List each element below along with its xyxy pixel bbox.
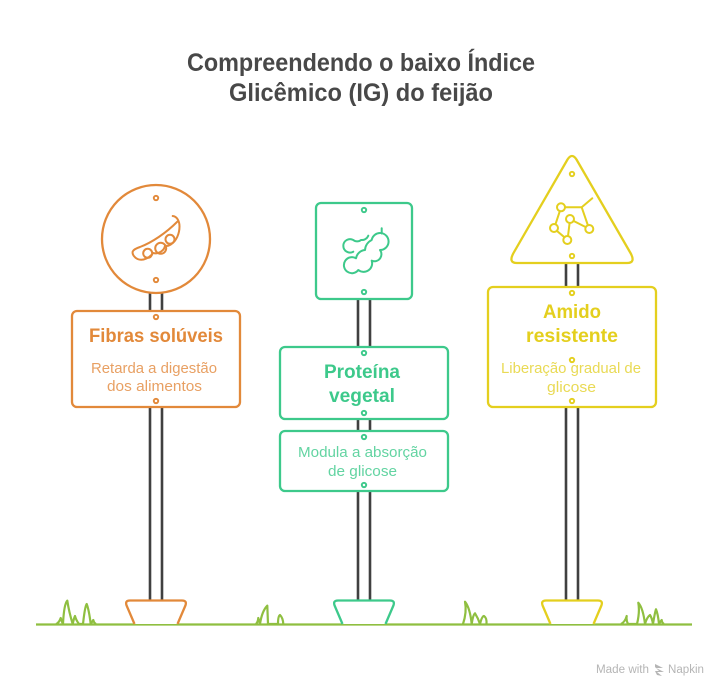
icon: bean pod [133, 216, 180, 260]
description: Modula a absorção: Modula a absorção [298, 444, 427, 461]
footer: Made with Napkin [596, 664, 704, 676]
title: Glicêmico (IG) do feijão [229, 79, 493, 107]
description: Liberação gradual: glicose [547, 379, 596, 396]
heading: Amido resistente: resistente [526, 325, 618, 347]
heading: Proteína vegetal: vegetal [329, 385, 395, 407]
panel: Proteína vegetal [280, 347, 448, 419]
square sign panel [316, 203, 412, 299]
posts: green sign [358, 296, 370, 600]
heading: Proteína vegetal [324, 361, 400, 407]
planter: green sign [334, 600, 394, 624]
posts: orange sign [150, 290, 162, 600]
description: Retarda a digestão: dos alimentos [107, 378, 202, 395]
icon: starch molecule [550, 198, 593, 244]
description: Retarda a digestão [91, 360, 217, 395]
heading: Proteína vegetal: Proteína [324, 361, 400, 383]
sign: Amido resistente [488, 156, 656, 624]
icon: protein chain [343, 228, 389, 273]
icon: Napkin logo [655, 664, 664, 676]
ground with grass [36, 601, 692, 624]
footer: Made with Napkin: Made with [596, 664, 649, 676]
bolts: yellow sign [570, 172, 574, 403]
planter: yellow sign [542, 600, 602, 624]
circular sign panel [102, 185, 210, 293]
heading: Amido resistente [526, 301, 618, 347]
panel: Fibras solúveis [72, 311, 240, 407]
sign: Fibras solúveis [72, 185, 240, 624]
description: Modula a absorção: de glicose [328, 463, 397, 480]
description: Retarda a digestão: Retarda a digestão [91, 360, 217, 377]
panel: Amido resistente [488, 287, 656, 407]
heading: Fibras solúveis: Fibras solúveis [89, 325, 223, 347]
title: Compreendendo o baixo Índice [187, 48, 535, 77]
bolts: orange sign [154, 196, 158, 403]
description: Modula a absorção [298, 444, 427, 480]
sign: Proteína vegetal [280, 203, 448, 624]
posts: yellow sign [566, 260, 578, 600]
bolts: green sign [362, 208, 366, 487]
triangular sign panel [511, 156, 633, 263]
planter: orange sign [126, 600, 186, 624]
description: Liberação gradual: Liberação gradual de [501, 360, 641, 377]
description: Liberação gradual [501, 360, 641, 396]
heading: Amido resistente: Amido [543, 301, 601, 323]
footer: Made with Napkin: Napkin [668, 664, 704, 676]
title [187, 48, 535, 107]
panel: Modula a absorção [280, 431, 448, 491]
